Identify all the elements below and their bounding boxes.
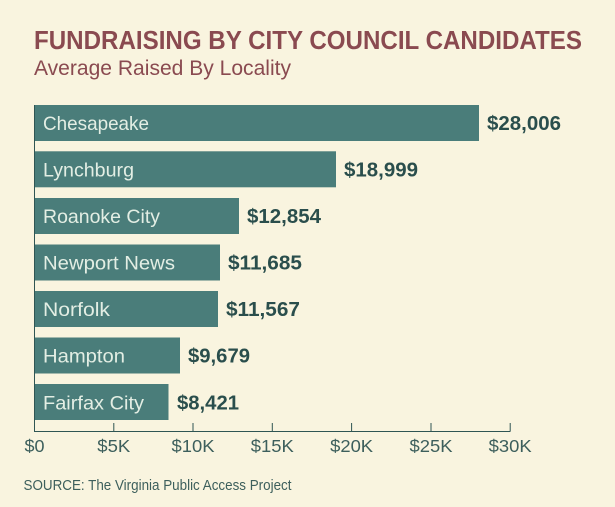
bar: Lynchburg: $18,999 [344, 160, 418, 182]
x axis [24, 105, 532, 456]
source note: SOURCE: The Virginia Public Access Project [24, 478, 292, 494]
x axis: $10K [172, 436, 215, 456]
bar: Chesapeake [34, 105, 561, 141]
x axis: $20K [330, 436, 373, 456]
bar: Fairfax City: Fairfax City [43, 392, 144, 414]
x axis: $15K [251, 436, 294, 456]
bar: Fairfax City [34, 384, 239, 420]
bar: Norfolk [34, 291, 300, 327]
bar: Chesapeake: Chesapeake [43, 113, 149, 135]
bar: Norfolk: Norfolk [43, 299, 110, 321]
bar: Newport News: Newport News [43, 252, 175, 274]
bar: Norfolk: $11,567 [226, 299, 300, 321]
x axis: $30K [489, 436, 532, 456]
bar: Newport News: $11,685 [228, 252, 302, 274]
bar: Hampton: Hampton [43, 346, 125, 368]
x axis: $0 [24, 436, 45, 456]
title: FUNDRAISING BY CITY COUNCIL CANDIDATES [34, 27, 582, 55]
bar: Hampton: $9,679 [188, 346, 250, 368]
x axis: $5K [97, 436, 131, 456]
bar: Chesapeake: $28,006 [487, 113, 561, 135]
x axis: $25K [410, 436, 453, 456]
subtitle: Average Raised By Locality [34, 57, 291, 80]
bar: Roanoke City: $12,854 [247, 206, 322, 228]
bar: Roanoke City: Roanoke City [43, 206, 160, 228]
bar: Roanoke City [34, 198, 322, 234]
bar: Lynchburg: Lynchburg [43, 160, 134, 182]
bar: Hampton [34, 338, 250, 374]
bar chart [34, 105, 561, 420]
bar: Fairfax City: $8,421 [177, 392, 239, 414]
bar: Newport News [34, 244, 302, 280]
bar: Lynchburg [34, 151, 418, 187]
